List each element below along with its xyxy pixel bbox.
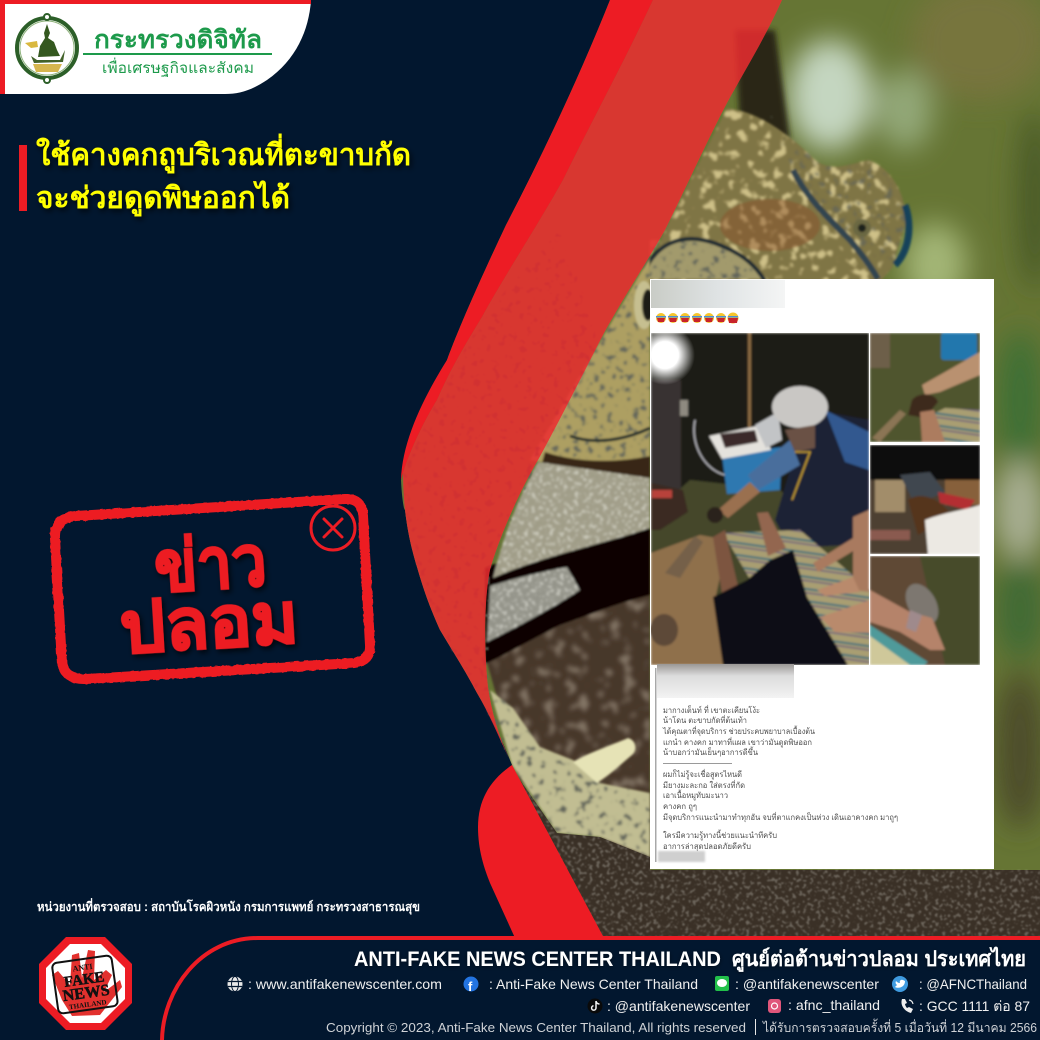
stamp wordmark: THAILAND: [69, 998, 107, 1011]
photo: toad background: [400, 0, 1040, 940]
translucent red band: [403, 0, 782, 765]
icon: close circle: [311, 506, 355, 550]
small photo: lying person: [870, 445, 980, 554]
small photo: hand and foot: [870, 333, 980, 442]
contact row 1: : Anti-Fake News Center Thailand: [489, 976, 698, 992]
emoji row: [656, 312, 738, 324]
post text: มากางเต็นท์ ที่ เขาตะเคียนโง้ะ: [663, 704, 760, 715]
post text: น้าโดน ตะขาบกัดที่ต้นเท้า: [663, 714, 747, 725]
post text: ใครมีความรู้ทางนี้ช่วยแนะนำทีครับ: [663, 829, 777, 841]
red hand: [52, 950, 122, 1016]
contact row 2: : afnc_thailand: [788, 997, 880, 1013]
stamp text: ข่าว: [152, 522, 269, 606]
post text: ผมก็ไม่รู้จะเชื่อสูตรไหนดี: [663, 768, 742, 780]
source agency: หน่วยงานที่ตรวจสอบ : สถาบันโรคผิวหนัง กรมการแพทย์ กระทรวงสาธารณสุข: [37, 898, 420, 915]
contact row 1: : www.antifakenewscenter.com: [248, 976, 442, 992]
stamp text: [114, 520, 300, 667]
title: จะช่วยดูดพิษออกได้: [36, 180, 290, 217]
post text: ได้คุณตาที่จุดบริการ ช่วยประคบพยาบาลเบื้องต้น: [662, 725, 815, 736]
icon: facebook: f: [468, 979, 473, 994]
blurred commenter name: [657, 664, 794, 698]
stamp wordmark: [52, 955, 118, 1014]
post text: คางคก ถูๆ: [663, 802, 697, 812]
social post card: [635, 279, 994, 869]
post text: แกนำ คางคก มาทาที่แผล เขาว่ามันดูดพิษออก: [663, 736, 812, 748]
header panel: ministry logo: [0, 0, 311, 94]
verification date: ได้รับการตรวจสอบครั้งที่ 5 เมื่อวันที่ 12 มีนาคม 2566: [762, 1018, 1037, 1035]
contact row 1: [228, 976, 1027, 994]
stamp wordmark: ANTI: [72, 962, 93, 974]
icon: facebook: [464, 976, 478, 994]
main photo: [635, 325, 870, 665]
stamp wordmark: FAKE: [63, 969, 106, 991]
toad head: [640, 108, 909, 290]
post text: น้าบอกว่ามันเย็นๆอาการดีขึ้น: [663, 746, 758, 757]
contact row 1: : @antifakenewscenter: [735, 976, 879, 992]
post text: มียางมะละกอ ใส่ตรงที่กัด: [663, 779, 745, 790]
contact row 2: : GCC 1111 ต่อ 87: [919, 998, 1030, 1014]
icon: tiktok: [588, 998, 602, 1014]
ministry tagline: เพื่อเศรษฐกิจและสังคม: [102, 57, 254, 77]
toad foot: [490, 690, 650, 857]
icon: globe: [228, 976, 242, 992]
footer panel: [162, 938, 1040, 1040]
small photo: bandaged foot: [870, 556, 980, 665]
post text: [662, 704, 898, 851]
ministry name: กระทรวงดิจิทัล: [94, 26, 262, 54]
red blob at bottom of band: [478, 765, 604, 938]
rocks: [520, 780, 1040, 940]
post text: เอาเนื้อหมูทับมะนาว: [663, 789, 728, 801]
toad flank and arm: [485, 240, 660, 870]
post text: มีจุดบริการแนะนำมาทำทุกอัน จบที่ตาแกคงเป็นห่วง เดินเอาคางคก มาถูๆ: [663, 811, 898, 823]
icon: line: [715, 976, 729, 991]
stamp wordmark: NEWS: [62, 982, 111, 1005]
stamp: fake news: [55, 499, 370, 679]
icon: instagram: [768, 999, 781, 1013]
icon: twitter: [892, 976, 908, 992]
logo: anti fake news center: [39, 937, 132, 1030]
blurred timestamp: [658, 851, 705, 862]
solid red stripe: [401, 0, 653, 480]
stamp text: ปลอม: [118, 579, 300, 667]
blurred poster name: [651, 280, 785, 308]
navy left panel: [0, 0, 610, 940]
title: [19, 133, 411, 217]
post text: อาการล่าสุดปลอดภัยดีครับ: [663, 842, 751, 851]
icon: phone: [901, 999, 913, 1013]
icon: ministry emblem: [17, 14, 77, 83]
contact row 2: : @antifakenewscenter: [607, 998, 750, 1014]
title: ใช้คางคกถูบริเวณที่ตะขาบกัด: [36, 133, 411, 174]
contact row 2: [588, 997, 1030, 1014]
copyright: Copyright © 2023, Anti-Fake News Center Thailand, All rights reserved: [326, 1020, 746, 1035]
contact row 1: : @AFNCThailand: [919, 976, 1027, 992]
